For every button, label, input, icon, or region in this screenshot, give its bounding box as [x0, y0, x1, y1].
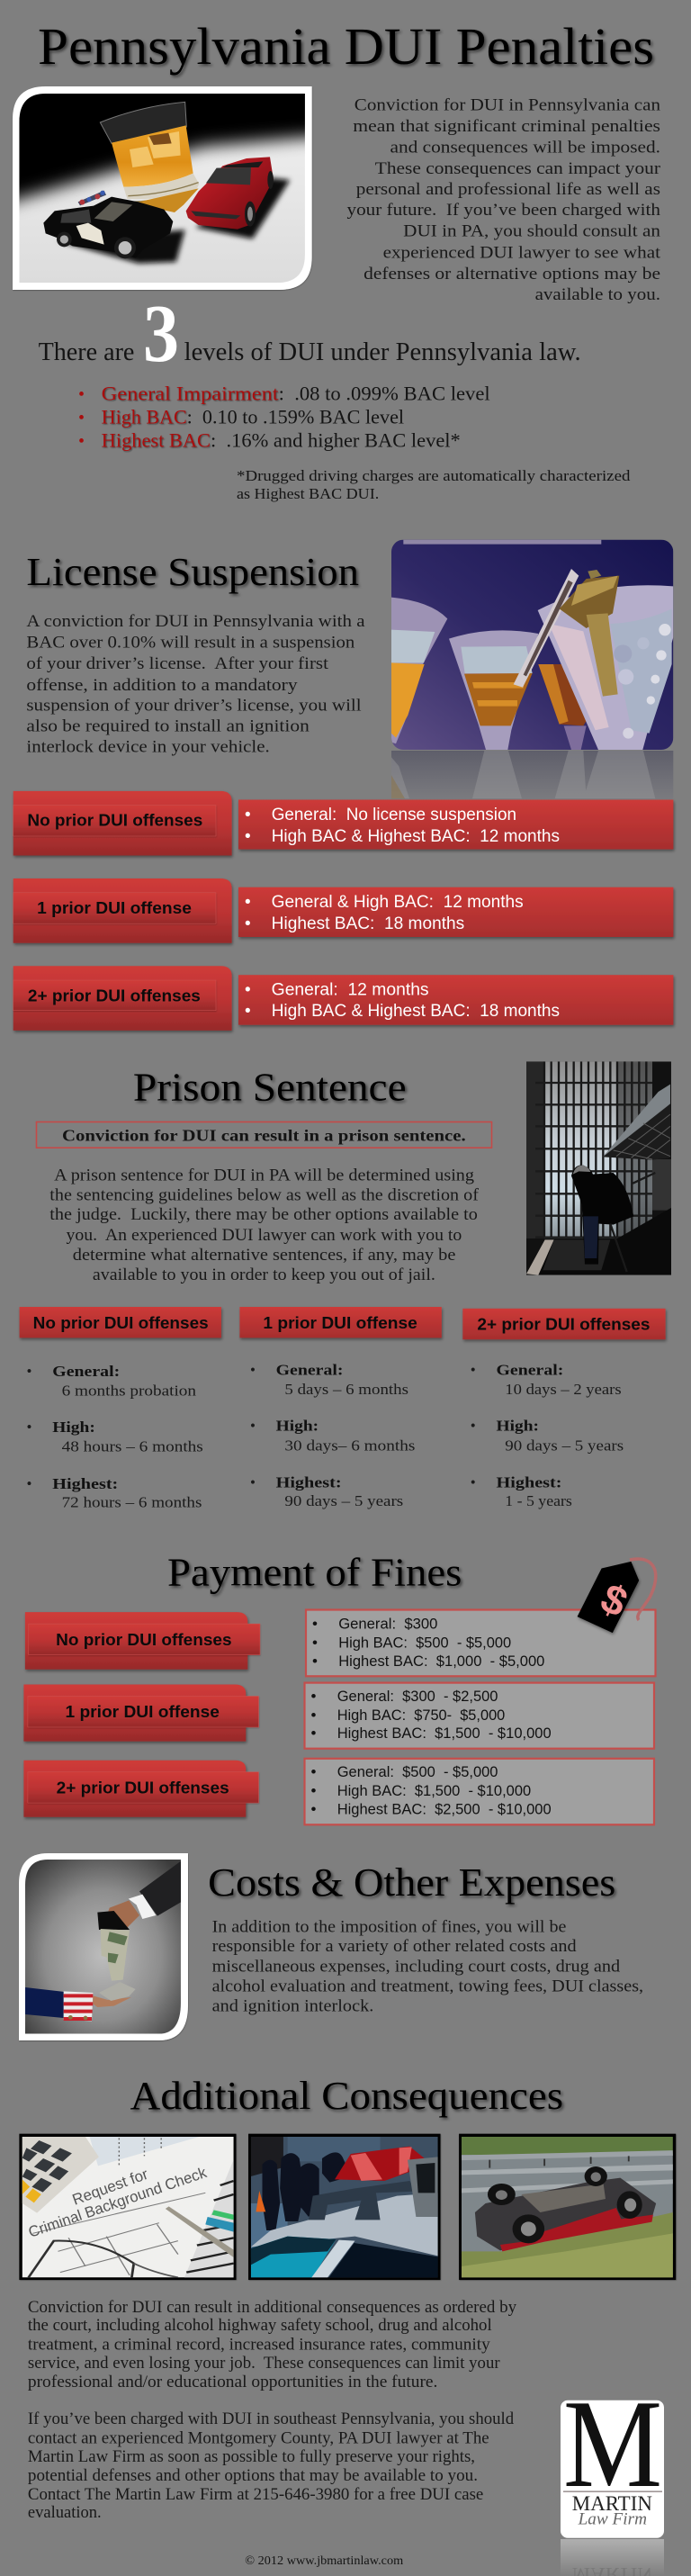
fines row: one prior: • — [311, 1688, 317, 1705]
sentence list: no prior: • — [27, 1419, 31, 1436]
fines row: two plus prior: 2+ prior DUI offenses — [57, 1778, 229, 1797]
license suspension paragraph: also be required to install an ignition — [26, 718, 310, 736]
fines row: two plus prior: • — [311, 1763, 317, 1780]
key chain and keys — [514, 569, 579, 688]
photo reflection — [391, 751, 673, 799]
floor — [617, 1208, 671, 1274]
sentence list: one prior: High: — [276, 1418, 319, 1435]
costs paragraph: alcohol evaluation and treatment, towing fees, DUI classes, — [212, 1978, 643, 1996]
sentence list: one prior: General: — [276, 1361, 344, 1379]
intro paragraph: These consequences can impact your — [375, 160, 660, 178]
photo: police car light — [248, 2134, 441, 2280]
glasses — [29, 2241, 134, 2277]
suspension row: no prior: • — [245, 806, 251, 824]
red car — [186, 157, 274, 230]
license suspension paragraph — [26, 613, 365, 757]
fines row: no prior: • — [312, 1635, 318, 1652]
sentence list: no prior: • — [27, 1475, 31, 1492]
footnote: *Drugged driving charges are automatically characterized — [237, 467, 631, 484]
costs paragraph: In addition to the imposition of fines, you will be — [212, 1918, 566, 1936]
fines row: one prior: High BAC: $750- $5,000 — [337, 1707, 505, 1724]
prison paragraph: the judge. Luckily, there may be other options available to — [49, 1206, 478, 1224]
logo: Martin Law Firm: M — [563, 2374, 662, 2514]
BAC level list: • — [78, 385, 85, 405]
contact paragraph: contact an experienced Montgomery County, PA DUI lawyer at The — [28, 2429, 489, 2447]
consequences paragraph: the court, including alcohol highway safety school, drug and alcohol — [28, 2317, 492, 2335]
BAC level list — [78, 383, 490, 452]
levels heading with large 3: levels of DUI under Pennsylvania law. — [184, 338, 581, 366]
fines row: one prior — [23, 1683, 654, 1749]
calculator — [22, 2137, 99, 2213]
header: one prior: 1 prior DUI offense — [263, 1313, 417, 1332]
sentence list: two plus prior: 10 days – 2 years — [505, 1381, 622, 1398]
prison paragraph: A prison sentence for DUI in PA will be determined using — [54, 1166, 474, 1184]
BAC level list: : .08 to .099% BAC level — [279, 383, 490, 405]
suspension row: two plus prior: 2+ prior DUI offenses — [28, 986, 201, 1004]
table sheet — [184, 2160, 234, 2277]
sentence list: one prior: • — [250, 1474, 256, 1491]
logo: Martin Law Firm: MARTIN — [572, 2492, 652, 2515]
title: Pennsylvania DUI Penalties — [38, 17, 654, 76]
contact paragraph: potential defenses and other options that may be available to you. — [28, 2467, 478, 2485]
fines row: two plus prior: • — [311, 1800, 317, 1817]
heading: prison sentence: Prison Sentence — [133, 1066, 407, 1110]
fines row: one prior: General: $300 - $2,500 — [337, 1688, 498, 1705]
callout: prison sentence: Conviction for DUI can result in a prison sentence. — [62, 1127, 466, 1145]
levels heading with large 3: There are — [39, 338, 134, 366]
header: one prior — [239, 1307, 442, 1338]
logo: Martin Law Firm: Law Firm — [578, 2509, 647, 2528]
intro paragraph: mean that significant criminal penalties — [353, 118, 660, 136]
bunk — [603, 1085, 670, 1157]
photo: man behind prison bars — [526, 1061, 672, 1275]
callout: prison sentence — [36, 1121, 491, 1148]
photo: overturned red car — [459, 2134, 676, 2280]
contact paragraph — [28, 2410, 515, 2522]
light bar — [335, 2147, 425, 2181]
suspension row: one prior — [13, 878, 673, 943]
photo: keys in cocktail glasses — [391, 540, 673, 750]
sentence list: one prior: • — [250, 1361, 256, 1379]
suspension row: one prior: • — [245, 914, 251, 933]
sentence list: two plus prior: 90 days – 5 years — [505, 1437, 624, 1454]
sentence list: no prior: General: — [52, 1363, 120, 1380]
sentence list: two plus prior: • — [471, 1474, 476, 1491]
sentence list: one prior: 30 days– 6 months — [284, 1437, 415, 1454]
fines row: no prior: High BAC: $500 - $5,000 — [338, 1635, 511, 1652]
fines row: one prior: 1 prior DUI offense — [65, 1702, 220, 1721]
suspension row: one prior: Highest BAC: 18 months — [272, 914, 464, 933]
sentence list: one prior: • — [250, 1418, 256, 1435]
costs paragraph: responsible for a variety of other related costs and — [212, 1938, 577, 1956]
BAC level list: : 0.10 to .159% BAC level — [187, 406, 404, 428]
header: two plus prior: 2+ prior DUI offenses — [477, 1315, 650, 1334]
photo: criminal background check form — [19, 2134, 236, 2280]
prison paragraph: determine what alternative sentences, if any, may be — [73, 1247, 455, 1265]
BAC level list: General Impairment — [102, 383, 279, 405]
prison paragraph: you. An experienced DUI lawyer can work with you to — [67, 1227, 462, 1245]
fines row: one prior: Highest BAC: $1,500 - $10,000 — [337, 1725, 552, 1742]
sentence list: two plus prior — [471, 1361, 624, 1509]
suspension row: no prior: • — [245, 827, 251, 846]
sentence list: no prior: 72 hours – 6 months — [62, 1494, 202, 1510]
middle glass — [449, 630, 538, 750]
suspension row: two plus prior: High BAC & Highest BAC: 18 months — [272, 1002, 560, 1021]
license suspension paragraph: offense, in addition to a mandatory — [26, 677, 298, 695]
consequences paragraph: professional and/or educational opportunities in the future. — [28, 2373, 437, 2391]
prison paragraph: the sentencing guidelines below as well as the discretion of — [49, 1186, 480, 1204]
photo: criminal background check form: Criminal Background Check — [26, 2164, 209, 2241]
heading: license suspension: License Suspension — [26, 550, 359, 594]
footnote — [237, 467, 631, 502]
upper sleeve — [139, 1860, 182, 1916]
heading: additional consequences: Additional Consequences — [130, 2074, 563, 2118]
suspension row: no prior: No prior DUI offenses — [27, 810, 202, 830]
intro paragraph: your future. If you’ve been charged with — [347, 202, 660, 220]
fines row: two plus prior: Highest BAC: $2,500 - $10,000 — [337, 1800, 552, 1817]
back glass — [538, 664, 588, 725]
suspension row: no prior: High BAC & Highest BAC: 12 months — [272, 827, 560, 846]
officers — [262, 2152, 351, 2230]
license suspension paragraph: suspension of your driver’s license, you will — [26, 697, 362, 715]
heading: payment of fines: Payment of Fines — [167, 1551, 462, 1595]
contact paragraph: evaluation. — [28, 2504, 102, 2522]
sentence list: one prior: 90 days – 5 years — [284, 1492, 403, 1509]
license suspension paragraph: interlock device in your vehicle. — [26, 739, 270, 757]
fines row: two plus prior: • — [311, 1782, 317, 1799]
sentence list: one prior: 5 days – 6 months — [284, 1381, 408, 1398]
fines row: no prior: General: $300 — [338, 1615, 437, 1633]
contact paragraph: If you’ve been charged with DUI in southeast Pennsylvania, you should — [28, 2410, 515, 2428]
sentence list: one prior — [250, 1361, 415, 1509]
icon: price tag: $ — [594, 1574, 634, 1626]
money — [101, 1929, 130, 1981]
intro paragraph: Conviction for DUI in Pennsylvania can — [354, 97, 660, 115]
sentence list: two plus prior: General: — [497, 1361, 563, 1379]
fines row: no prior: • — [312, 1615, 318, 1633]
sentence list: no prior: 6 months probation — [62, 1382, 197, 1399]
lower sleeve — [25, 1987, 65, 2018]
levels heading with large 3 — [39, 288, 581, 379]
contact paragraph: Martin Law Firm as soon as possible to fully preserve your rights, — [28, 2448, 475, 2466]
consequences paragraph: Conviction for DUI can result in additional consequences as ordered by — [28, 2299, 517, 2317]
icon: price tag — [578, 1559, 656, 1633]
suspension row: two plus prior: • — [245, 981, 251, 999]
sentence list: one prior: Highest: — [276, 1474, 342, 1491]
fines row: one prior: • — [311, 1707, 317, 1724]
prison paragraph — [49, 1166, 480, 1284]
intro paragraph: experienced DUI lawyer to see what — [383, 244, 661, 262]
prison paragraph: available to you in order to keep you out of jail. — [93, 1266, 435, 1284]
intro paragraph: personal and professional life as well as — [356, 181, 660, 199]
photo: criminal background check form: Request for — [70, 2166, 150, 2209]
sentence list: no prior: Highest: — [52, 1475, 118, 1492]
fines row: one prior: • — [311, 1725, 317, 1742]
suspension row: one prior: • — [245, 893, 251, 912]
suspension row: two plus prior — [13, 966, 673, 1031]
sentence list: no prior: • — [27, 1363, 31, 1380]
header: two plus prior — [462, 1309, 666, 1339]
car roof — [251, 2193, 438, 2256]
fines row: two plus prior: High BAC: $1,500 - $10,000 — [337, 1782, 531, 1799]
sentence list: two plus prior: • — [471, 1418, 476, 1435]
header: no prior — [20, 1307, 221, 1338]
fines row: no prior: Highest BAC: $1,000 - $5,000 — [338, 1653, 544, 1670]
fines row: no prior: • — [312, 1653, 318, 1670]
sentence list: two plus prior: High: — [497, 1418, 539, 1435]
sentence list: no prior: High: — [52, 1419, 95, 1436]
left glass — [391, 598, 447, 743]
right glass — [538, 585, 673, 750]
BAC level list: Highest BAC — [102, 429, 211, 452]
license suspension paragraph: A conviction for DUI in Pennsylvania with a — [26, 613, 365, 631]
sentence list: two plus prior: Highest: — [497, 1474, 561, 1491]
suspension row: one prior: General & High BAC: 12 months — [272, 893, 524, 912]
suspension row: no prior: General: No license suspension — [272, 806, 516, 824]
suspension row: one prior: 1 prior DUI offense — [37, 898, 192, 917]
glass — [100, 102, 186, 143]
windows — [251, 2237, 336, 2277]
fines row: no prior: No prior DUI offenses — [56, 1630, 232, 1649]
fines row: two plus prior: General: $500 - $5,000 — [337, 1763, 498, 1780]
costs paragraph: and ignition interlock. — [212, 1997, 373, 2015]
copyright: © 2012 www.jbmartinlaw.com — [245, 2554, 403, 2568]
intro paragraph: DUI in PA, you should consult an — [403, 223, 660, 241]
intro paragraph: and consequences will be imposed. — [390, 139, 660, 157]
logo reflection — [561, 2539, 664, 2576]
sentence list: no prior: 48 hours – 6 months — [62, 1438, 203, 1455]
car — [475, 2178, 656, 2250]
consequences paragraph: treatment, a criminal record, increased insurance rates, community — [28, 2336, 491, 2354]
consequences paragraph: service, and even losing your job. These consequences can limit your — [28, 2355, 500, 2373]
man — [571, 1165, 633, 1265]
suspension row: two plus prior: General: 12 months — [272, 981, 429, 999]
license suspension paragraph: of your driver’s license. After your first — [26, 655, 329, 673]
intro paragraph: available to you. — [535, 286, 660, 304]
costs paragraph — [212, 1918, 643, 2015]
intro paragraph: defenses or alternative options may be — [363, 266, 660, 284]
BAC level list: : .16% and higher BAC level* — [211, 429, 461, 452]
sentence list: two plus prior: • — [471, 1361, 476, 1379]
costs paragraph: miscellaneous expenses, including court costs, drug and — [212, 1958, 621, 1976]
sentence list: two plus prior: 1 - 5 years — [505, 1492, 572, 1509]
contact paragraph: Contact The Martin Law Firm at 215-646-3980 for a free DUI case — [28, 2486, 483, 2504]
BAC level list: • — [78, 432, 85, 452]
pen — [166, 2206, 234, 2257]
form lines — [32, 2193, 205, 2275]
header: no prior: No prior DUI offenses — [33, 1313, 209, 1332]
sentence list: no prior — [27, 1363, 203, 1510]
footnote: as Highest BAC DUI. — [237, 485, 379, 502]
photo: money passing between hands — [19, 1853, 188, 2040]
intro paragraph — [347, 97, 661, 304]
BAC level list: High BAC — [102, 406, 187, 428]
heading: costs and other expenses: Costs & Other Expenses — [208, 1860, 615, 1905]
license suspension paragraph: BAC over 0.10% will result in a suspension — [26, 635, 354, 653]
suspension row: two plus prior: • — [245, 1002, 251, 1021]
consequences paragraph — [28, 2299, 517, 2391]
fines row: two plus prior — [23, 1759, 654, 1824]
BAC level list: • — [78, 409, 85, 428]
car shadows — [58, 230, 185, 264]
levels heading with large 3: 3 — [143, 288, 179, 379]
suspension row: no prior — [13, 791, 673, 855]
police car — [43, 197, 173, 258]
fines row: no prior — [25, 1609, 655, 1676]
photo: whiskey glass and toy cars — [13, 86, 313, 291]
